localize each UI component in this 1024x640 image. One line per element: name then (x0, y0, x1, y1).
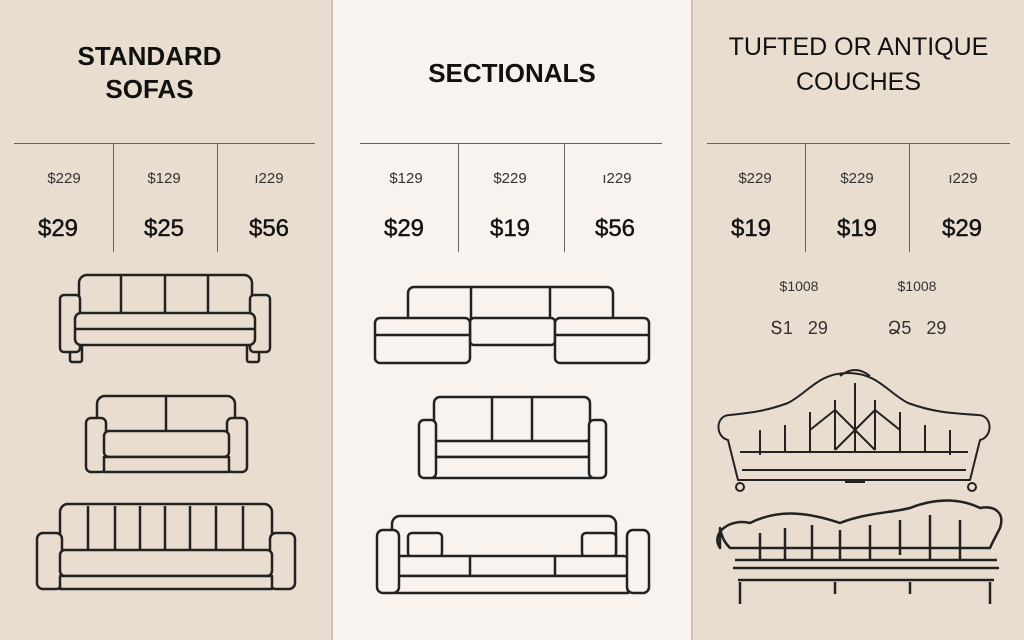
panel: tufted or antique (693, 0, 1024, 640)
extra prices (770, 278, 946, 338)
price table: $19 (731, 215, 771, 242)
extra prices: $1008 (898, 278, 936, 294)
price table: $19 (490, 215, 530, 242)
heading: sectionals: SECTIONALS (428, 58, 596, 88)
icon: camelback sofa (717, 500, 1001, 604)
price table: $229 (738, 170, 772, 187)
heading: standard sofas: STANDARD (78, 41, 221, 71)
heading: standard sofas: SOFAS (105, 74, 194, 104)
price table: $29 (38, 215, 78, 242)
price table: $229 (47, 170, 81, 187)
icon: sofa with pillows (377, 516, 649, 593)
icon: loveseat (86, 396, 247, 472)
extra prices: $1008 (780, 278, 818, 294)
price table: ı229 (602, 170, 632, 187)
price table: $56 (595, 215, 635, 242)
icon: standard sofa 1 (60, 275, 270, 362)
price table: $29 (942, 215, 982, 242)
panel: sectionals (333, 0, 693, 640)
heading: tufted (729, 33, 988, 96)
price table (360, 143, 662, 252)
price table: $229 (840, 170, 874, 187)
price table: $29 (384, 215, 424, 242)
extra prices: Ձ5 29 (888, 318, 946, 338)
price table: ı229 (254, 170, 284, 187)
price table (707, 143, 1010, 252)
heading: standard sofas (78, 41, 221, 104)
icon: long sofa (37, 504, 295, 589)
price table: $129 (147, 170, 181, 187)
icon: tufted chesterfield (718, 370, 990, 491)
heading: tufted: TUFTED OR ANTIQUE (729, 33, 988, 61)
price table: ı229 (948, 170, 978, 187)
icon: sectional (375, 287, 649, 363)
price table (14, 143, 315, 252)
price table: $229 (493, 170, 527, 187)
heading: tufted: COUCHES (796, 68, 921, 96)
price table: $25 (144, 215, 184, 242)
icon: three-seat sofa (419, 397, 606, 478)
panel: standard sofas (0, 0, 333, 640)
price table: $56 (249, 215, 289, 242)
price table: $19 (837, 215, 877, 242)
price table: $129 (389, 170, 423, 187)
extra prices: Տ1 29 (770, 318, 828, 338)
